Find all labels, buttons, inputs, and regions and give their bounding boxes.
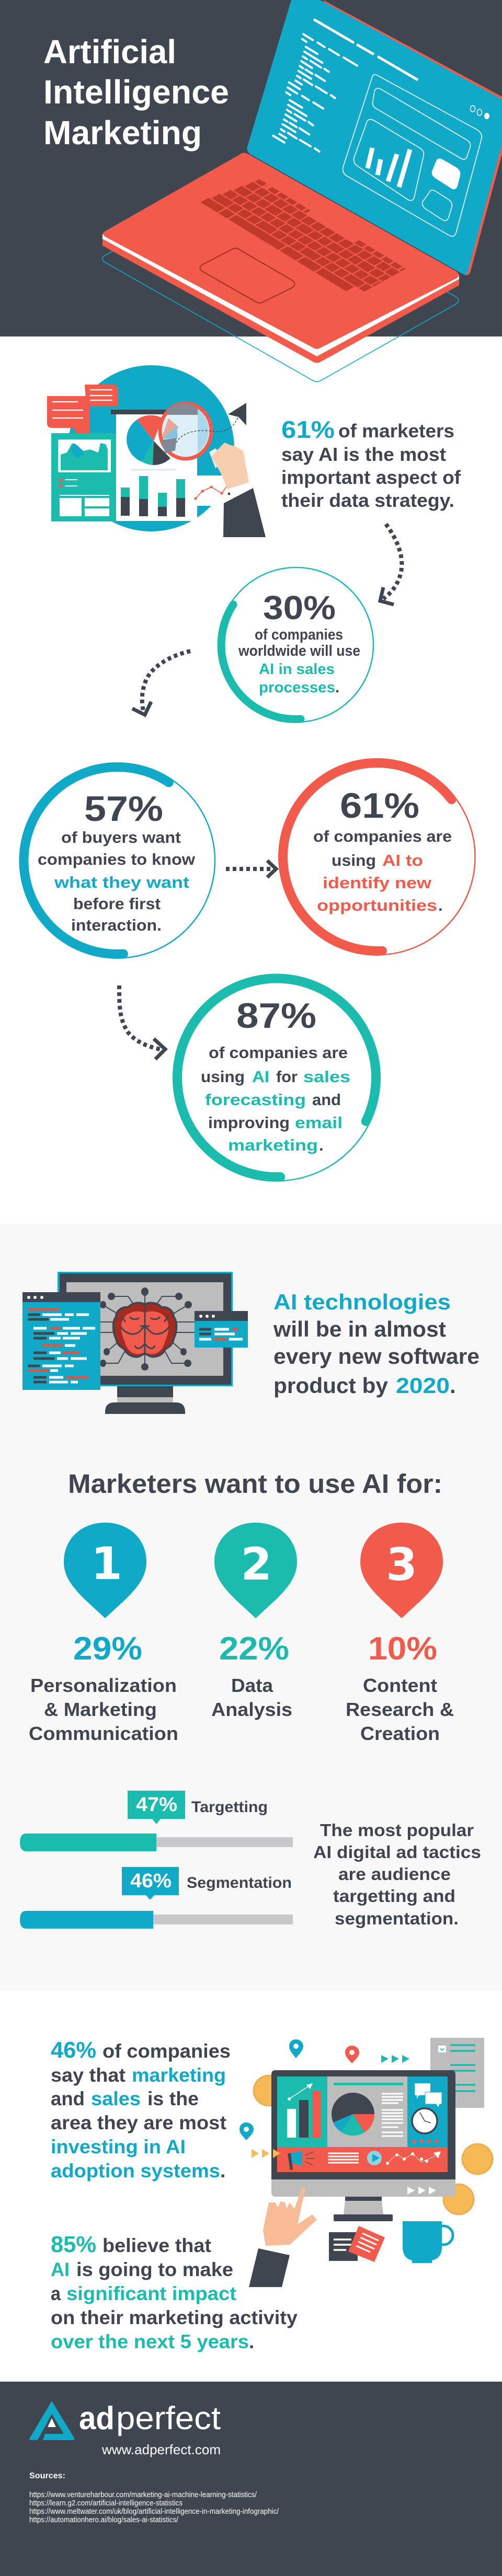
panel: 87% circle: marketing <box>228 1136 318 1154</box>
text: 46% of companies: marketing <box>132 2064 226 2086</box>
panel: 57% circle: before first <box>73 895 161 913</box>
arrow: to 57% circle <box>132 651 190 715</box>
bar chart: targetting: Targetting <box>191 1798 268 1816</box>
trackpad <box>200 248 295 303</box>
right code window <box>195 1311 248 1348</box>
text: 85% believe: significant impact <box>66 2283 236 2304</box>
panel: 87% circle: using <box>201 1067 245 1086</box>
panel: 57% circle: 57% <box>84 789 163 829</box>
panel: 61% circle: of companies are <box>313 827 452 845</box>
text: 46% of companies: is the <box>147 2088 199 2109</box>
panel: 87% circle: sales <box>303 1067 350 1086</box>
text: 61% of marketers <box>281 416 461 511</box>
growth bars <box>287 2083 321 2138</box>
neural connections <box>100 1287 195 1371</box>
text: 85% believe: AI <box>51 2259 70 2280</box>
item: content research: 10% <box>368 1631 437 1667</box>
item: data analysis: 22% <box>219 1631 289 1667</box>
speech bubbles <box>47 385 118 438</box>
panel: 87% circle <box>174 974 380 1181</box>
magnifying glass <box>160 403 226 468</box>
sources: https://automationhero.ai/blog/sales-ai-statistics/ <box>29 2515 179 2524</box>
text: popular AI ad tactics <box>313 1820 481 1928</box>
coins <box>254 2075 493 2214</box>
panel: 87% circle: for <box>276 1067 298 1086</box>
panel: 61% circle: 61% <box>340 786 419 826</box>
panel: 61% circle: AI to <box>382 851 423 869</box>
panel: 87% circle: . <box>319 1136 324 1154</box>
teal dashboard panel <box>51 433 116 521</box>
item: personalization: 1 <box>91 1538 122 1590</box>
panel: 87% circle: and <box>312 1090 341 1109</box>
location pins <box>239 2039 359 2140</box>
text: 46% of companies: say that <box>51 2064 126 2086</box>
pointing hand <box>249 2187 317 2287</box>
text: 85% believe: believe that <box>102 2235 211 2256</box>
text: AI technologies: every new software <box>273 1344 480 1368</box>
text: AI technologies: . <box>450 1373 456 1398</box>
chat bubbles, clock and stars <box>412 2083 442 2143</box>
item: content research: 3 <box>386 1539 417 1591</box>
panel: 30% circle: . <box>335 679 339 696</box>
item: content research: Creation <box>360 1723 440 1744</box>
bar chart: segmentation: 46% <box>130 1870 172 1892</box>
icon: AI brain monitor <box>22 1272 248 1414</box>
panel: 87% circle: AI <box>252 1067 269 1086</box>
logo: ad <box>79 2400 115 2436</box>
panel: header <box>0 0 502 336</box>
panel: 57% circle: of buyers want <box>61 828 181 846</box>
screen code lines <box>273 34 357 152</box>
arrow: 57% to 61% <box>226 861 276 877</box>
text: popular AI ad tactics: AI digital ad tactics <box>313 1842 481 1862</box>
item: personalization <box>29 1523 178 1744</box>
logo <box>29 2400 221 2440</box>
text: popular AI ad tactics: The most popular <box>320 1820 474 1840</box>
text: 46% of companies: . <box>220 2160 225 2182</box>
laptop deck <box>103 153 459 349</box>
panel: 61% circle: identify new <box>323 874 432 892</box>
brain <box>113 1303 176 1357</box>
coffee cup <box>403 2221 453 2263</box>
text: 46% of companies: and <box>51 2088 85 2109</box>
item: content research: Research & <box>346 1699 454 1720</box>
paper plane <box>176 403 246 443</box>
text: popular AI ad tactics: targetting and <box>333 1886 455 1906</box>
panel: 87% circle: of companies are <box>209 1043 348 1062</box>
item: data analysis: Data <box>231 1675 273 1696</box>
red bar contents <box>288 2151 441 2170</box>
item: content research: Content <box>363 1675 437 1696</box>
text: 46% of companies: of companies <box>102 2040 231 2062</box>
text: 61% of marketers: say AI is the most <box>281 444 446 465</box>
text: 85% believe: a <box>51 2283 61 2304</box>
item: data analysis <box>211 1523 297 1720</box>
text: 85% believe <box>51 2232 298 2352</box>
sources: Sources: <box>29 2471 65 2480</box>
orange triangles <box>252 2149 280 2158</box>
bar chart: targetting <box>20 1791 293 1851</box>
item: personalization: Communication <box>29 1723 178 1744</box>
panel: 30% circle: 30% <box>263 589 336 626</box>
small line chart <box>191 475 228 506</box>
teal triangles <box>381 2055 409 2063</box>
screen dots <box>471 106 489 119</box>
panel: 57% circle: what they want <box>54 873 189 891</box>
text: 85% believe: is going to make <box>76 2259 233 2280</box>
panel: 30% circle: processes <box>259 679 335 696</box>
laptop screen <box>247 0 502 275</box>
blue circle backdrop <box>68 365 234 531</box>
text: 85% believe: . <box>249 2331 254 2352</box>
bar chart: segmentation: Segmentation <box>187 1874 292 1892</box>
text: 46% of companies: area they are most <box>51 2112 226 2133</box>
screen white box <box>432 158 460 189</box>
left code window <box>22 1292 100 1390</box>
text: 46% of companies <box>51 2037 231 2182</box>
text: 61% of marketers: their data strategy. <box>281 490 454 511</box>
text: AI technologies: 2020 <box>396 1373 450 1398</box>
laptop base side <box>102 234 459 363</box>
report document <box>111 410 197 521</box>
panel: 61% circle: . <box>438 896 443 914</box>
keyboard <box>204 176 404 295</box>
checklist panel <box>430 2038 484 2108</box>
text: AI technologies: product by <box>273 1373 389 1398</box>
panel: 87% circle: forecasting <box>205 1090 306 1109</box>
panel: 30% circle <box>219 567 373 722</box>
screen panels <box>343 75 482 236</box>
text: 61% of marketers: 61% <box>281 416 335 443</box>
text: 85% believe: 85% <box>51 2232 96 2257</box>
panel: footer <box>0 2382 502 2576</box>
panel: 61% circle: using <box>332 851 376 869</box>
pointing hand <box>211 443 266 537</box>
screen line <box>314 19 418 80</box>
text: popular AI ad tactics: are audience <box>338 1864 451 1884</box>
item: data analysis: 2 <box>241 1538 272 1591</box>
laptop shadow outline <box>102 250 459 381</box>
text: AI technologies <box>273 1290 480 1398</box>
text: 46% of companies: adoption systems <box>51 2160 220 2182</box>
arrow: to 30% circle <box>380 524 402 605</box>
icon: laptop <box>102 0 502 381</box>
panel: 87% circle: email <box>295 1113 343 1132</box>
notes <box>329 2226 385 2262</box>
sources: https://www.ventureharbour.com/marketing-ai-machine-learning-statistics/ <box>29 2490 257 2499</box>
panel: 57% circle: companies to know <box>38 850 196 868</box>
title <box>43 33 229 152</box>
monitor <box>58 1272 233 1414</box>
title: Artificial <box>43 33 176 71</box>
panel: 87% circle: improving <box>208 1113 290 1132</box>
sources: https://learn.g2.com/artificial-intelligence-statistics <box>29 2499 182 2508</box>
text: popular AI ad tactics: segmentation. <box>335 1909 459 1928</box>
item: content research <box>346 1523 454 1744</box>
panel: 30% circle: worldwide will use <box>238 643 360 659</box>
website: www.adperfect.com <box>101 2442 221 2457</box>
panel: 61% circle <box>279 759 475 955</box>
heading: Marketers want to use AI for: Marketers want to use AI for: <box>68 1469 442 1499</box>
icon: data analysis illustration <box>47 365 266 537</box>
item: personalization: 29% <box>73 1631 142 1667</box>
laptop lid edge <box>323 0 502 275</box>
text: 85% believe: on their marketing activity <box>51 2307 298 2328</box>
panel: 30% circle: of companies <box>255 626 343 643</box>
logo mark <box>29 2401 74 2440</box>
text: 61% of marketers: of marketers <box>338 420 454 442</box>
item: data analysis: Analysis <box>211 1699 292 1720</box>
text: 46% of companies: sales <box>91 2088 141 2109</box>
panel: 30% circle: AI in sales <box>259 661 335 678</box>
pie chart <box>332 2083 403 2136</box>
title: Intelligence <box>43 73 229 111</box>
text: 61% of marketers: important aspect of <box>281 467 461 488</box>
screen bar chart <box>368 148 410 187</box>
panel: 57% circle <box>20 763 215 958</box>
sources: https://www.meltwater.com/uk/blog/artificial-intelligence-in-marketing-infographic/ <box>29 2507 279 2516</box>
arrow: 57% to 87% <box>119 985 165 1059</box>
bar chart: segmentation <box>20 1867 293 1929</box>
text: 46% of companies: investing in AI <box>51 2136 186 2157</box>
text: 85% believe: over the next 5 years <box>51 2331 249 2352</box>
text: AI technologies: will be in almost <box>273 1317 446 1341</box>
panel: 57% circle: interaction. <box>71 916 162 934</box>
item: personalization: & Marketing <box>44 1699 157 1720</box>
text: 46% of companies: 46% <box>51 2037 96 2063</box>
panel: 61% circle: opportunities <box>317 896 437 914</box>
bar chart: targetting: 47% <box>136 1794 177 1816</box>
logo: perfect <box>116 2400 221 2436</box>
panel: 87% circle: 87% <box>236 996 316 1036</box>
icon: marketing dashboard illustration <box>239 2038 493 2287</box>
sources <box>29 2471 279 2524</box>
text: AI technologies: AI technologies <box>273 1290 451 1314</box>
title: Marketing <box>43 114 202 152</box>
monitor <box>271 2070 455 2221</box>
item: personalization: Personalization <box>30 1675 177 1696</box>
panel: grey section <box>0 1224 502 1991</box>
